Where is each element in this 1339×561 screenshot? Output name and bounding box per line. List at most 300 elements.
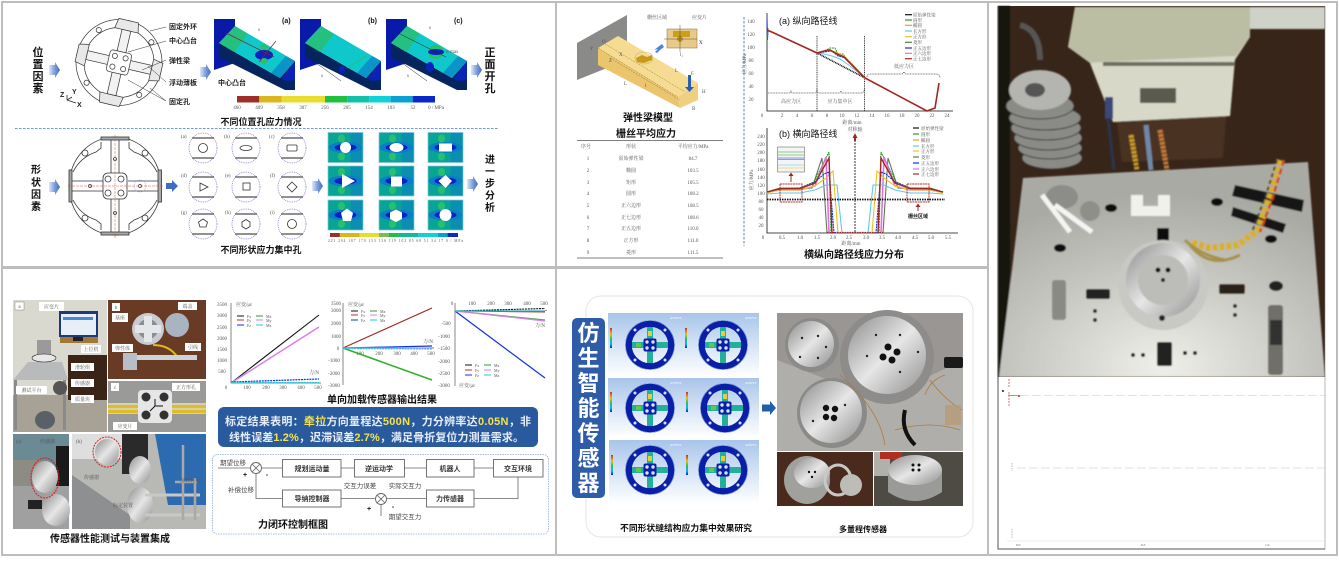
chart: Fx loading: 力/N bbox=[309, 369, 319, 376]
chart: Fy loading: -1000 bbox=[328, 359, 340, 364]
photo a: test bench: a bbox=[18, 305, 21, 310]
chart b: transverse path stress: 140 bbox=[757, 176, 765, 181]
caption: shape holes: 不同形状应力集中孔 bbox=[220, 244, 302, 255]
axis triad label: Z bbox=[60, 92, 65, 99]
table: grid average stress: 108.5 bbox=[687, 204, 699, 209]
table: grid average stress: 110.0 bbox=[687, 227, 699, 232]
elastic beam model illustration: H bbox=[702, 90, 706, 95]
legend b: 菱形 bbox=[921, 154, 930, 161]
legend b: 圆形 bbox=[921, 131, 930, 138]
photo c: square hole closeup bbox=[108, 381, 206, 432]
chart a: longitudinal path stress: 2 bbox=[781, 114, 784, 119]
chart: Fy loading: 1000 bbox=[331, 335, 342, 340]
inset: strain gauge bbox=[647, 14, 707, 58]
arrow: structure to FE bbox=[200, 64, 211, 80]
photo c: square hole closeup: 正方形孔 bbox=[176, 384, 196, 391]
chart a: longitudinal path stress: 140 bbox=[747, 20, 755, 25]
hole shape catalogue bbox=[181, 133, 306, 239]
chart a: longitudinal path stress: 应力/MPa bbox=[741, 53, 748, 74]
caption: path stress distribution: 横纵向路径线应力分布 bbox=[804, 248, 904, 261]
vertical title tag: 智 bbox=[577, 371, 600, 396]
heading: further analysis: 分 bbox=[485, 189, 495, 202]
chart b: transverse path stress: 0.5 bbox=[779, 236, 786, 241]
FE result a bbox=[214, 18, 295, 90]
hole shape catalogue: (f) bbox=[270, 174, 275, 179]
chart: Fy loading: -2000 bbox=[328, 372, 340, 377]
chart b: transverse path stress: 2.0 bbox=[830, 236, 837, 241]
chart b: transverse path stress: (b) 横向路径线 bbox=[779, 128, 838, 139]
heading: front opening: 孔 bbox=[484, 82, 496, 95]
photo: integration a bbox=[13, 434, 70, 529]
photo: assembled sensor bbox=[874, 452, 963, 506]
legend a: 正六边形 bbox=[913, 50, 931, 57]
photo: integration b: 加载装置 bbox=[180, 477, 200, 484]
panel: experimental setup photo bbox=[988, 2, 1337, 555]
FE result c: (c) bbox=[454, 18, 463, 25]
vertical title tag bbox=[572, 318, 605, 498]
chart: Fx loading: 300 bbox=[279, 386, 287, 391]
photo: integration a: 传感器 bbox=[40, 438, 55, 445]
arrow: position to sensor bbox=[49, 62, 60, 78]
chart b: transverse path stress: 80 bbox=[758, 200, 764, 205]
color scale: position stress: 154 bbox=[365, 106, 373, 111]
legend a: 圆形 bbox=[913, 17, 922, 24]
caption: multi-range sensor: 多量程传感器 bbox=[839, 524, 887, 534]
chart: Fx loading: Fy bbox=[247, 318, 251, 323]
table: grid average stress: 正五边形 bbox=[621, 225, 641, 232]
FE result b bbox=[300, 18, 381, 90]
color scale: position stress: 358 bbox=[277, 106, 285, 111]
color scale: position stress: 205 bbox=[343, 106, 351, 111]
chart: Fx loading: Mz bbox=[266, 323, 272, 328]
caption: shape structure stress study: 不同形状缝结构应力集中效果研究 bbox=[620, 522, 752, 533]
table: grid average stress: 正七边形 bbox=[621, 214, 641, 221]
photo: integration b: 标定装置 bbox=[113, 502, 133, 509]
table: grid average stress: 正六边形 bbox=[621, 202, 641, 209]
chart: Fx loading: 2500 bbox=[217, 326, 228, 331]
chart: Fy loading: Fy bbox=[361, 313, 365, 318]
chart b: transverse path stress: 2.5 bbox=[846, 236, 853, 241]
chart: Fx loading: 500 bbox=[314, 386, 322, 391]
chart b: transverse path stress: 3.5 bbox=[879, 236, 886, 241]
inset: strain gauge: 应变片 bbox=[692, 14, 707, 21]
chart: Fx loading: Mx bbox=[266, 314, 272, 319]
heading: front opening: 开 bbox=[484, 70, 496, 83]
chart: Fy loading: My bbox=[380, 313, 386, 318]
elastic beam model illustration: X bbox=[619, 53, 623, 58]
heading: further analysis: 析 bbox=[485, 201, 495, 214]
FE results: wheel structures: ANSYS bbox=[745, 381, 757, 385]
photo a: test bench: 质量块 bbox=[75, 396, 90, 403]
FE results: wheel structures: ANSYS bbox=[745, 316, 757, 320]
FE result a: (a) bbox=[282, 18, 291, 25]
table: grid average stress: 108.6 bbox=[687, 216, 699, 221]
chart: Fx loading: 100 bbox=[243, 386, 251, 391]
photo a: test bench bbox=[13, 300, 107, 432]
chart b: transverse path stress: 60 bbox=[758, 208, 764, 213]
chart a: longitudinal path stress: 6 bbox=[811, 114, 814, 119]
chart: Fz loading: Mx bbox=[494, 363, 500, 368]
chart b: transverse path stress: 栅丝区域 bbox=[908, 213, 928, 220]
photo: integration b: 传感器 bbox=[84, 474, 99, 481]
chart a: longitudinal path stress: 14 bbox=[870, 114, 875, 119]
FE result a: s bbox=[258, 28, 260, 33]
photo c: square hole closeup: c bbox=[114, 386, 117, 391]
table: grid average stress: 2 bbox=[587, 169, 590, 174]
chart b: transverse path stress: 应力/MPa bbox=[748, 169, 755, 190]
chart: Fy loading: Fz bbox=[361, 318, 365, 323]
chart: Fy loading: 2000 bbox=[331, 322, 342, 327]
chart a: longitudinal path stress: 4 bbox=[796, 114, 799, 119]
FE results: wheel structures: ANSYS bbox=[745, 443, 757, 447]
heading: position factor: 素 bbox=[32, 81, 44, 95]
table: grid average stress: 形状 bbox=[626, 143, 636, 150]
chart: Fy loading: Fx bbox=[361, 309, 365, 314]
color scale: position stress: 52 bbox=[410, 106, 416, 111]
table: grid average stress: 菱形 bbox=[626, 249, 636, 256]
color scale: position stress: 409 bbox=[255, 106, 263, 111]
arrow: to front opening bbox=[471, 62, 482, 78]
color scale: position stress: 103 bbox=[387, 106, 395, 111]
chart: Fz loading: Fy bbox=[475, 368, 479, 373]
heading: position factor: 位 bbox=[32, 45, 44, 59]
chart: Fz loading: -500 bbox=[441, 322, 451, 327]
chart: Fy loading: 应变/με bbox=[348, 301, 364, 308]
table: grid average stress: 正方形 bbox=[623, 237, 639, 244]
FE result c bbox=[386, 18, 467, 90]
chart: Fx loading: 1500 bbox=[217, 348, 228, 353]
diagram: sensor isometric structure bbox=[67, 11, 171, 114]
chart b: transverse path stress: 160 bbox=[757, 168, 765, 173]
chart b: transverse path stress: 20 bbox=[758, 224, 764, 229]
chart a: longitudinal path stress: 120 bbox=[747, 33, 755, 38]
hole shape catalogue: (h) bbox=[225, 211, 231, 216]
chart: Fy loading: 3000 bbox=[331, 309, 342, 314]
caption: uniaxial load output: 单向加载传感器输出结果 bbox=[327, 393, 437, 406]
photo c: square hole closeup: 应变片 bbox=[117, 423, 133, 430]
hole shape catalogue: (a) bbox=[181, 135, 187, 140]
chart a: longitudinal path stress: 80 bbox=[748, 59, 754, 64]
photo a: test bench: 上位机 bbox=[83, 346, 99, 353]
vertical title tag: 仿 bbox=[577, 321, 600, 346]
legend b: 正七边形 bbox=[921, 171, 939, 178]
inset: strain gauge: 栅丝区域 bbox=[647, 14, 667, 21]
chart: Fz loading: -2500 bbox=[438, 372, 450, 377]
heading: further analysis: 一 bbox=[485, 167, 495, 178]
legend a: 正五边形 bbox=[913, 45, 931, 52]
chart: Fy loading: 300 bbox=[393, 352, 401, 357]
heading: further analysis: 进 bbox=[485, 154, 495, 166]
legend a: 正方形 bbox=[913, 34, 927, 40]
chart: Fz loading: 100 bbox=[468, 302, 476, 307]
diagram: force closed-loop control: 逆运动学 bbox=[365, 464, 393, 473]
color scale: position stress: 256 bbox=[321, 106, 329, 111]
heading: position factor: 因 bbox=[32, 70, 44, 83]
chart: Fx loading: Fz bbox=[247, 323, 251, 328]
heading: shape factor: 因 bbox=[31, 189, 41, 201]
chart: Fz loading: -3000 bbox=[438, 384, 450, 389]
chart a: longitudinal path stress: 18 bbox=[900, 114, 905, 119]
axis triad label: X bbox=[77, 102, 82, 109]
table: grid average stress: 6 bbox=[587, 216, 590, 221]
heading: shape factor: 状 bbox=[31, 176, 41, 189]
table: grid average stress: 矩形 bbox=[626, 179, 636, 186]
chart a: longitudinal path stress bbox=[741, 13, 953, 126]
diagram: force closed-loop control: 交互环境 bbox=[504, 464, 532, 473]
color scale: position stress bbox=[233, 96, 445, 111]
panel: stress analysis bbox=[556, 2, 988, 267]
chart b: transverse path stress: 0 bbox=[762, 236, 765, 241]
table: grid average stress: 3 bbox=[587, 181, 590, 186]
chart: Fx loading: 400 bbox=[297, 386, 305, 391]
hole shape catalogue: (b) bbox=[224, 135, 230, 140]
chart a: longitudinal path stress: 60 bbox=[748, 72, 754, 77]
photo a: test bench: 应变片 bbox=[44, 304, 59, 310]
callout: calibration results bbox=[218, 407, 538, 447]
elastic beam model illustration bbox=[577, 15, 706, 112]
photo: disassembled sensor bbox=[777, 452, 873, 506]
chart: Fx loading: My bbox=[266, 318, 272, 323]
heading: further analysis: 步 bbox=[485, 177, 495, 190]
diagram: force closed-loop control: 补偿位移 bbox=[228, 485, 254, 494]
chart: Fz loading bbox=[438, 302, 548, 389]
color scale: shape stress: 221 204 187 170 153 136 119 102 85 68 51 34 17 0 / MPa bbox=[328, 239, 463, 243]
chart: Fx loading: 1000 bbox=[217, 359, 228, 364]
chart b: transverse path stress: 1.0 bbox=[797, 236, 804, 241]
callouts: sensor parts bbox=[128, 22, 197, 106]
callouts: sensor parts: 固定孔 bbox=[169, 97, 190, 106]
diagram: force closed-loop control: + bbox=[243, 472, 247, 479]
chart: Fy loading: 0 bbox=[337, 347, 340, 352]
table: grid average stress: 序号 bbox=[581, 143, 591, 150]
callout: calibration results: 线性误差1.2%，迟滞误差2.7%，满足骨折复位力测量需求。 bbox=[229, 430, 524, 444]
hole shape catalogue: (e) bbox=[225, 174, 231, 179]
photo b: sensor parts: b bbox=[115, 306, 118, 311]
arrow: shapes to FE bbox=[312, 178, 323, 194]
chart: Fz loading: -2000 bbox=[438, 360, 450, 365]
diagram: force closed-loop control: 期望位移 bbox=[220, 458, 246, 467]
chart: Fx loading: 200 bbox=[262, 386, 270, 391]
diagram: force closed-loop control: - bbox=[266, 472, 269, 479]
chart: Fy loading: 力/N bbox=[423, 338, 433, 345]
FE result b: s bbox=[321, 74, 323, 79]
chart b: transverse path stress: 1.5 bbox=[814, 236, 821, 241]
chart: Fy loading: 400 bbox=[410, 352, 418, 357]
photo b: sensor parts: 引线 bbox=[188, 344, 198, 351]
FE results: wheel structures: ANSYS bbox=[670, 443, 682, 447]
chart a: longitudinal path stress: 24 bbox=[944, 114, 950, 119]
faint trace chart: 0.5 bbox=[1141, 543, 1146, 547]
chart b: transverse path stress: 40 bbox=[758, 216, 764, 221]
callout: calibration results: 标定结果表明：牵拉方向量程达500N，力分辨率达0.05N，非 bbox=[225, 414, 531, 428]
vertical title tag: 能 bbox=[577, 396, 600, 421]
chart a: longitudinal path stress: 20 bbox=[914, 114, 920, 119]
photo: data acquisition and load plate bbox=[998, 6, 1325, 377]
chart a: longitudinal path stress: 40 bbox=[748, 85, 754, 90]
arrow: to further analysis bbox=[467, 176, 478, 192]
chart: Fx loading: 2000 bbox=[217, 337, 228, 342]
color scale: position stress: 307 bbox=[299, 106, 307, 111]
photo a: test bench: 滑轮组 bbox=[75, 364, 90, 371]
chart b: transverse path stress bbox=[748, 126, 958, 247]
diagram: force closed-loop control: - bbox=[392, 504, 395, 511]
chart b: transverse path stress: 100 bbox=[757, 192, 765, 197]
chart a: longitudinal path stress: 0 bbox=[761, 114, 764, 119]
diagram: force closed-loop control: 规划运动量 bbox=[294, 464, 330, 473]
table: grid average stress: 111.5 bbox=[688, 251, 699, 256]
FE results: wheel structures: ANSYS bbox=[670, 316, 682, 320]
elastic beam model illustration: Z bbox=[609, 59, 612, 64]
chart: Fz loading: 500 bbox=[540, 302, 548, 307]
caption: beam model: 弹性梁模型 bbox=[623, 111, 673, 124]
legend b: 椭圆 bbox=[921, 137, 930, 144]
legend a: 正七边形 bbox=[913, 56, 931, 62]
chart b: transverse path stress: 5.5 bbox=[945, 236, 952, 241]
elastic beam model illustration: F bbox=[691, 72, 694, 77]
table: grid average stress: 椭圆 bbox=[626, 167, 636, 174]
legend b bbox=[913, 125, 944, 178]
table: grid average stress: 原始弹性梁 bbox=[618, 155, 644, 162]
photo b: sensor parts: 基座 bbox=[115, 314, 125, 322]
FE result b: (b) bbox=[368, 18, 377, 25]
hole shape catalogue: (c) bbox=[269, 135, 275, 140]
chart: Fy loading bbox=[328, 301, 435, 389]
vertical title tag: 器 bbox=[577, 471, 600, 496]
heading: position factor: 置 bbox=[32, 58, 44, 71]
chart: Fy loading: Mx bbox=[380, 309, 386, 314]
photo: multi-range sensors bbox=[777, 310, 963, 451]
diagram: force closed-loop control: 导纳控制器 bbox=[294, 494, 330, 503]
elastic beam model illustration: Y bbox=[590, 47, 594, 52]
faint trace chart: 0.0 bbox=[1016, 543, 1021, 547]
chart: Fy loading: 200 bbox=[375, 352, 383, 357]
photo a: test bench: 测试平台 bbox=[21, 387, 42, 394]
chart: Fy loading: -3000 bbox=[328, 384, 340, 389]
hole shape catalogue: (i) bbox=[270, 211, 275, 216]
table: grid average stress bbox=[577, 127, 723, 258]
chart: Fx loading: 3500 bbox=[217, 303, 228, 308]
FE results: wheel structures bbox=[608, 313, 759, 504]
color scale: shape stress bbox=[328, 233, 463, 243]
chart b: transverse path stress: 180 bbox=[757, 159, 765, 164]
elastic beam model illustration: L bbox=[675, 69, 678, 74]
axis triad label: Y bbox=[72, 89, 77, 96]
chart: Fz loading: Fz bbox=[475, 373, 479, 378]
heading: shape factor: 素 bbox=[31, 200, 41, 213]
FE results: wheel structures: ANSYS bbox=[670, 381, 682, 385]
chart: Fz loading: Fx bbox=[475, 363, 479, 368]
callouts: sensor parts: 中心凸台 bbox=[169, 36, 197, 45]
chart b: transverse path stress: 240 bbox=[757, 135, 765, 140]
callouts: sensor parts: 浮动薄板 bbox=[169, 78, 197, 87]
diagram: force closed-loop control: 交互力误差 bbox=[344, 481, 377, 490]
legend a: 原始弹性梁 bbox=[913, 12, 936, 18]
panel: position factors and shape factors bbox=[2, 2, 556, 267]
arrow: FE to sensor photo bbox=[762, 401, 776, 415]
table: grid average stress: 4 bbox=[587, 192, 590, 197]
panel: performance testing bbox=[2, 268, 556, 555]
diagram: force closed-loop control bbox=[212, 454, 548, 534]
chart: Fy loading: Mz bbox=[380, 318, 386, 323]
diagram: force closed-loop control: 机器人 bbox=[440, 464, 460, 473]
table: grid average stress: 103.5 bbox=[687, 169, 699, 174]
FE result c: s bbox=[407, 74, 409, 79]
FE tile grid bbox=[328, 132, 463, 230]
elastic beam model illustration: B bbox=[692, 107, 696, 112]
legend b: 正五边形 bbox=[921, 160, 939, 167]
table: grid average stress: 111.0 bbox=[688, 239, 699, 244]
chart b: transverse path stress: 对称轴 bbox=[847, 126, 863, 133]
photo: integration a: (a) bbox=[16, 440, 22, 445]
vertical title tag: 传 bbox=[577, 421, 600, 446]
chart a: longitudinal path stress: 22 bbox=[930, 114, 935, 119]
chart: Fz loading: 力/N bbox=[535, 322, 545, 329]
chart b: transverse path stress: 220 bbox=[757, 143, 765, 148]
chart: Fz loading: -1500 bbox=[438, 347, 450, 352]
hole shape catalogue: (g) bbox=[181, 211, 187, 216]
photo: integration b bbox=[72, 434, 206, 529]
legend b: 正方形 bbox=[921, 148, 935, 155]
diagram: force closed-loop control: 实际交互力 bbox=[389, 481, 421, 490]
chart: Fy loading: 100 bbox=[356, 352, 364, 357]
table: grid average stress: 9 bbox=[587, 251, 590, 256]
chart b: transverse path stress: 4.5 bbox=[912, 236, 919, 241]
elastic beam model illustration: L bbox=[624, 82, 627, 87]
chart b: transverse path stress: 200 bbox=[757, 151, 765, 156]
elastic beam model illustration: l bbox=[645, 84, 647, 89]
legend a: 菱形 bbox=[913, 39, 922, 46]
inset: strain gauge: X bbox=[699, 41, 703, 46]
chart a: longitudinal path stress: 12 bbox=[854, 114, 860, 119]
table: grid average stress: 105.5 bbox=[687, 181, 699, 186]
chart: Fz loading: -1000 bbox=[438, 335, 450, 340]
chart b: transverse path stress: 4.0 bbox=[895, 236, 902, 241]
heading: front opening: 面 bbox=[484, 58, 496, 71]
chart a: longitudinal path stress: 高应力区 bbox=[781, 98, 801, 105]
chart a: longitudinal path stress: 20 bbox=[748, 98, 754, 103]
table: grid average stress: 圆形 bbox=[626, 190, 636, 197]
photo a: test bench: 传感器 bbox=[75, 380, 90, 387]
table: grid average stress: 1 bbox=[587, 157, 590, 162]
chart: Fx loading: Fx bbox=[247, 314, 251, 319]
diagram: force closed-loop control: 力闭环控制框图 bbox=[258, 518, 328, 531]
chart: Fz loading: 300 bbox=[504, 302, 512, 307]
legend a: 椭圆 bbox=[913, 22, 922, 29]
chart: Fz loading: Mz bbox=[494, 373, 500, 378]
faint trace chart bbox=[998, 6, 1325, 549]
chart a: longitudinal path stress: 10 bbox=[840, 114, 845, 119]
chart: Fx loading: 应变/με bbox=[236, 301, 252, 308]
chart: Fy loading: 3500 bbox=[331, 302, 342, 307]
arrow: sensor to hole shapes bbox=[166, 180, 178, 192]
chart: Fz loading: My bbox=[494, 368, 500, 373]
table: grid average stress: 108.2 bbox=[687, 192, 699, 197]
chart a: longitudinal path stress: 16 bbox=[884, 114, 890, 119]
diagram: force closed-loop control: 力传感器 bbox=[436, 494, 464, 503]
chart b: transverse path stress: 120 bbox=[757, 184, 765, 189]
table: grid average stress: 5 bbox=[587, 204, 590, 209]
legend a bbox=[905, 12, 936, 62]
heading: front opening: 正 bbox=[484, 46, 496, 59]
diagram: force closed-loop control: + bbox=[367, 506, 371, 513]
table: grid average stress: 8 bbox=[587, 239, 590, 244]
arrow: shape to sensor bbox=[49, 179, 60, 195]
photo b: sensor parts bbox=[108, 300, 206, 379]
chart a: longitudinal path stress: 100 bbox=[747, 46, 755, 51]
legend a: 长方形 bbox=[913, 28, 927, 35]
chart: Fx loading: 500 bbox=[218, 370, 226, 375]
chart: Fz loading: 400 bbox=[523, 302, 531, 307]
